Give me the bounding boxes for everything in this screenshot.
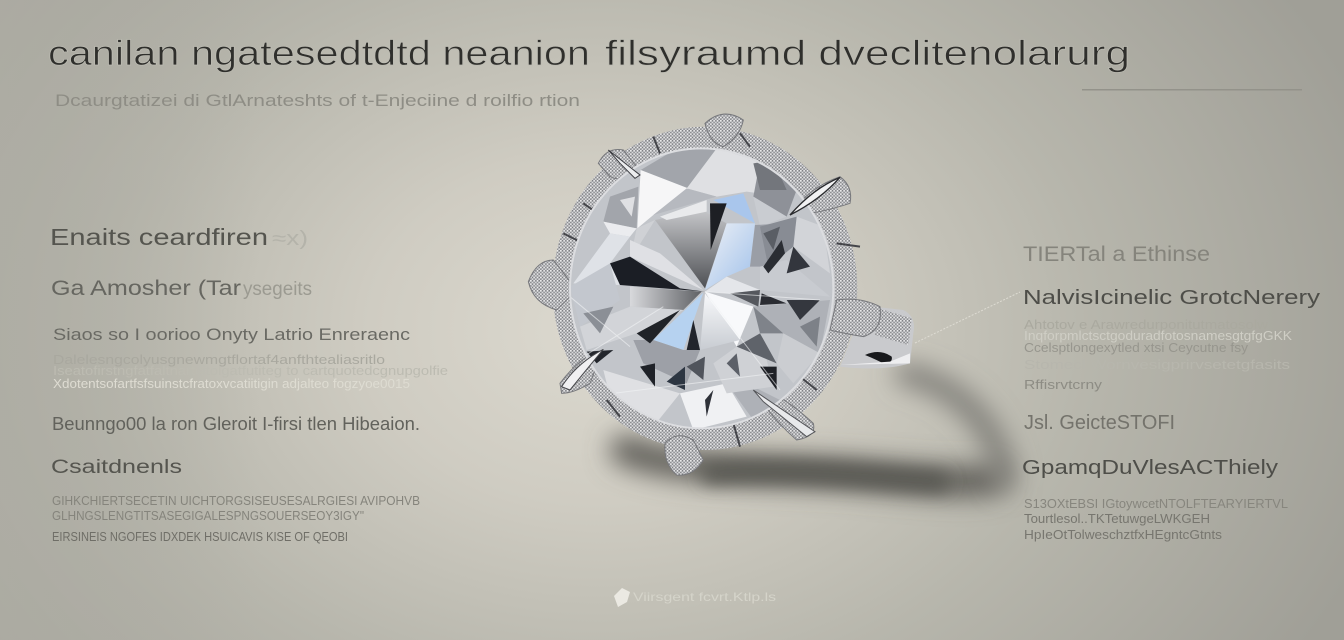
- left column text: [50, 224, 448, 544]
- left paragraph 2: GLHNGSLENGTITSASEGIGALESPNGSOUERSEOY3IGY": [52, 508, 364, 523]
- left heading 1: ≈x): [272, 228, 308, 250]
- right paragraph 1: Ccelsptlongexytled xtsi Ceycutne fsy: [1024, 341, 1249, 355]
- left paragraph 2: [52, 493, 420, 544]
- right paragraph 1: Stomecl Wornvesigprirvsetetgfasits: [1024, 358, 1290, 372]
- left heading 1: [50, 224, 308, 250]
- header rule: [1082, 89, 1302, 90]
- left paragraph 1: Iseatofirstngfatfaltnartcitolgatfutiteg to cartquotedcgnupgolfie: [53, 363, 448, 378]
- right heading 4: GpamqDuVlesACThiely: [1022, 457, 1278, 479]
- left heading 4: Beunngo00 la ron Gleroit I-firsi tlen Hibeaion.: [52, 414, 420, 434]
- footer logo and text: Viirsgent fcvrt.Ktlp.ls: [633, 590, 776, 604]
- right paragraph 2: S13OXtEBSI IGtoywcetNTOLFTEARYIERTVL: [1024, 496, 1288, 511]
- prong: top: [705, 114, 743, 147]
- dark pavilion facets: [583, 197, 820, 417]
- prong: upper right: [787, 177, 851, 217]
- right paragraph 2: HpIeOtTolweschztfxHEgntcGtnts: [1024, 527, 1223, 542]
- left heading 5: Csaitdnenls: [51, 457, 182, 478]
- prong: bottom right: [753, 390, 814, 440]
- prong: right: [830, 299, 880, 337]
- shadow of the ring: [625, 374, 1005, 482]
- left paragraph 1: Dalelesngcolyusgnewmgtflortaf4anfthtealiasritlo: [53, 352, 385, 367]
- left heading 1: Enaits ceardfiren: [50, 224, 268, 250]
- right column text: [1022, 243, 1320, 542]
- pave halo: [563, 133, 860, 447]
- left heading 2: [51, 277, 312, 300]
- title: canilan ngatesedtdtd neanion: [48, 34, 590, 73]
- right heading 1: TIERTal a Ethinse: [1023, 243, 1210, 266]
- left heading 2: ysegeits: [243, 279, 312, 300]
- right heading 3: Jsl. GeicteSTOFI: [1024, 412, 1175, 434]
- left paragraph 2: GIHKCHIERTSECETIN UICHTORGSISEUSESALRGIESI AVIPOHVB: [52, 493, 420, 508]
- right paragraph 1: Rffisrvtcrny: [1024, 378, 1103, 392]
- icon: small diamond: [614, 588, 630, 607]
- right paragraph 1: Ahtotov e Arawredurponitutmatosolw: [1024, 318, 1269, 332]
- right paragraph 2: Tourtlesol..TKTetuwgeLWKGEH: [1024, 511, 1210, 526]
- prong: upper left: [598, 149, 642, 179]
- prong: left: [528, 260, 577, 310]
- right heading 2: NalvisIcinelic GrotcNerery: [1023, 287, 1320, 309]
- leader line: [915, 292, 1020, 343]
- ring shank: [840, 307, 914, 369]
- diamond ring: [528, 114, 914, 475]
- facet highlights: [570, 292, 820, 393]
- prong: lower left: [560, 348, 603, 393]
- diamond stone: [570, 147, 833, 430]
- footer logo and text: [614, 588, 776, 607]
- prongs: [528, 114, 880, 475]
- subtitle: Dcaurgtatizei di GtlArnateshts of t-Enjeciine d roilfio rtion: [55, 91, 580, 110]
- stone rim: [570, 148, 833, 428]
- right paragraph 1: InqforpmlctsctgoduradfotosnamesgtgfgGKK: [1024, 329, 1293, 343]
- left paragraph 2: EIRSINEIS NGOFES IDXDEK HSUICAVIS KISE OF QEOBI: [52, 529, 348, 544]
- left heading 2: Ga Amosher (Tar: [51, 277, 241, 300]
- right paragraph 2: [1024, 496, 1288, 542]
- left paragraph 1: [53, 352, 448, 391]
- title: filsyraumd dveclitenolarurg: [605, 34, 1130, 73]
- left heading 3: Siaos so I oorioo Onyty Latrio Enreraenc: [53, 325, 411, 344]
- title: [48, 34, 1130, 73]
- right paragraph 1: [1024, 318, 1293, 392]
- crown facets: [570, 147, 830, 430]
- prong: bottom: [665, 436, 703, 475]
- left paragraph 1: Xdotentsofartfsfsuinstcfratoxvcatiitigin adjalteo fogzyoe0015: [53, 376, 410, 391]
- prong claws: [562, 150, 840, 437]
